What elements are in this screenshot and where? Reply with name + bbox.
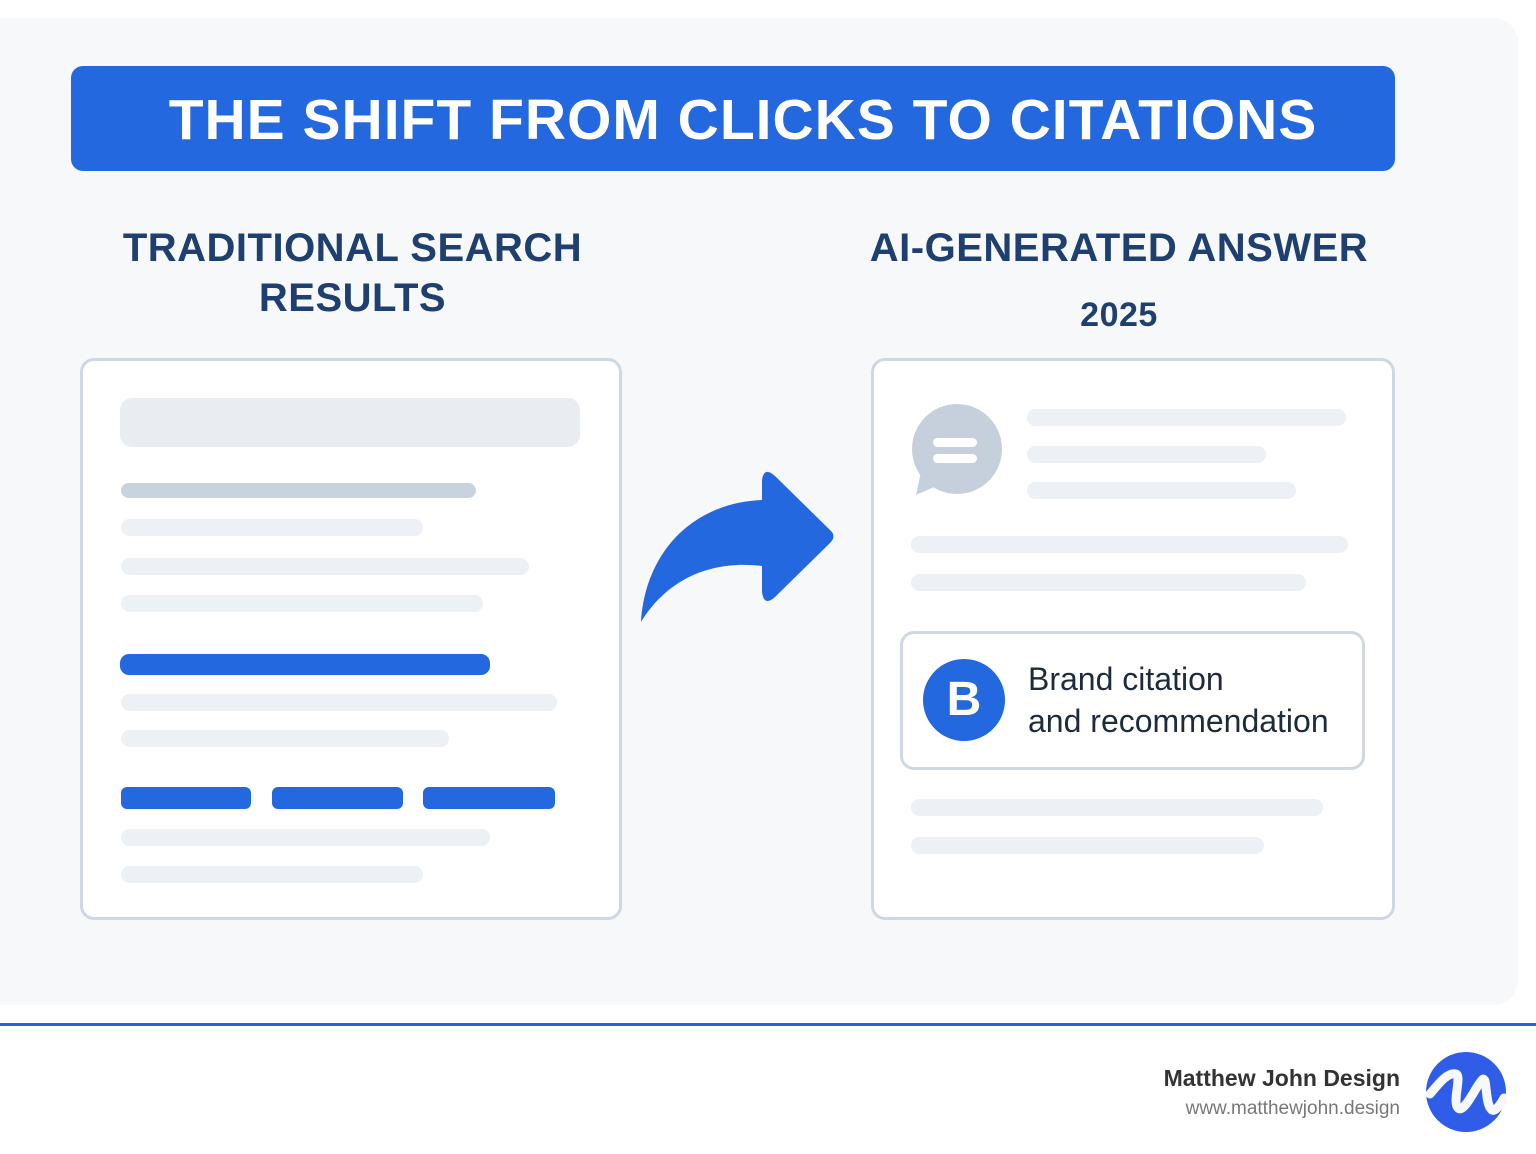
title banner: [71, 66, 1395, 171]
panel: AI answer card: [871, 358, 1395, 920]
callout text: Brand citation: [1028, 661, 1224, 697]
logo: [1426, 1052, 1506, 1132]
icon: B circle: [923, 659, 1005, 741]
callout text: [1028, 661, 1329, 739]
footer divider: [0, 1023, 1536, 1026]
search box: [120, 398, 580, 447]
icon: chat bubble: [912, 404, 1002, 495]
panel: traditional search card: [80, 358, 622, 920]
title banner: THE SHIFT FROM CLICKS TO CITATIONS: [169, 88, 1317, 152]
heading: traditional search results: TRADITIONAL SEARCH: [123, 226, 582, 270]
footer brand text: [1164, 1065, 1400, 1119]
heading: AI-generated answer 2025: AI-GENERATED ANSWER: [870, 226, 1368, 270]
callout text: and recommendation: [1028, 703, 1329, 739]
heading: AI-generated answer 2025: 2025: [1080, 296, 1158, 334]
blue link bar: [120, 654, 490, 675]
heading: traditional search results: RESULTS: [259, 276, 446, 320]
footer brand text: Matthew John Design: [1164, 1065, 1400, 1091]
heading: traditional search results: [123, 226, 582, 320]
heading: AI-generated answer 2025: [870, 226, 1368, 334]
blue tag bars: [121, 787, 555, 809]
icon: B circle: B: [947, 673, 981, 726]
callout: brand citation: [900, 631, 1365, 770]
footer brand text: www.matthewjohn.design: [1186, 1098, 1400, 1119]
